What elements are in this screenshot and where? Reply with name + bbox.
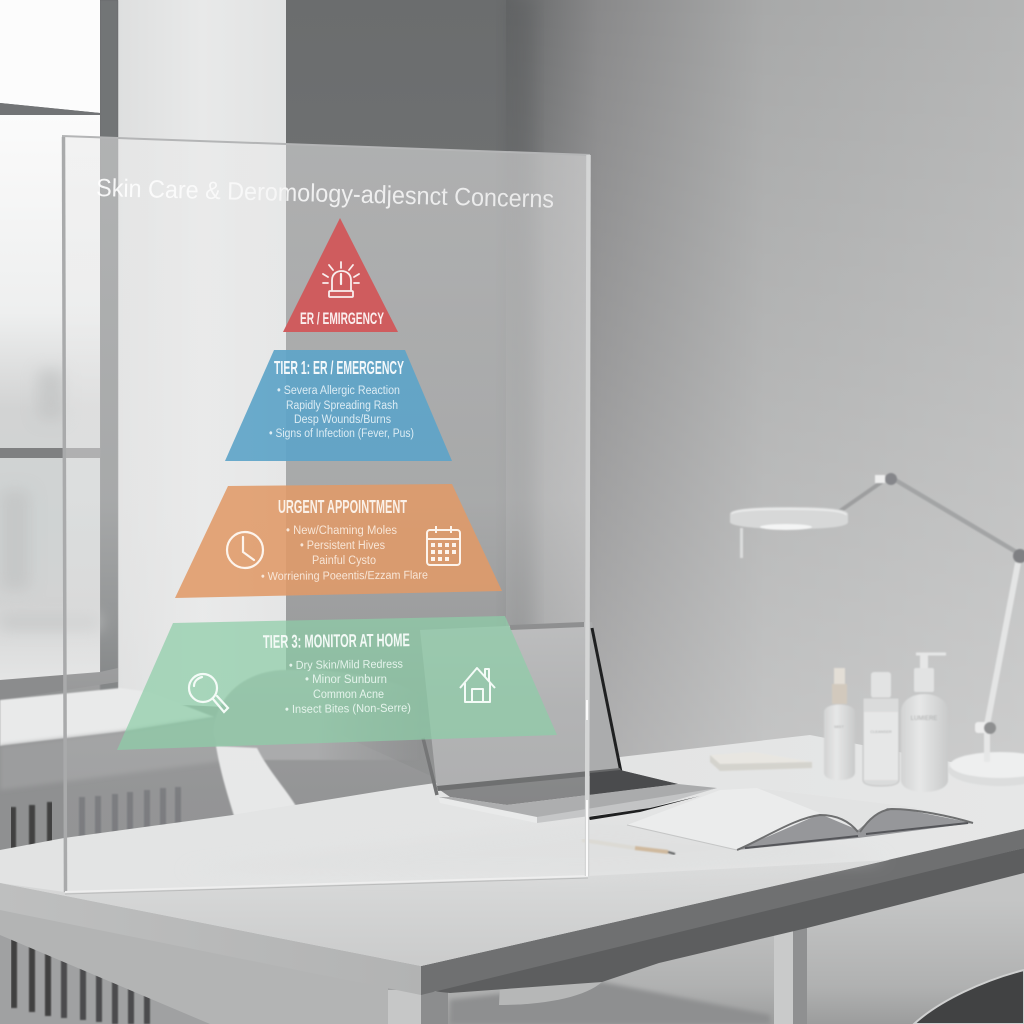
chair behind the panel bbox=[213, 670, 420, 816]
tier: orange urgent appointment trapezoid: • New/Chaming Moles bbox=[286, 525, 397, 537]
skincare bottles: CLEANSER bbox=[870, 729, 892, 734]
small notebook on desk bbox=[710, 752, 812, 771]
tier: blue Tier 1 trapezoid: • Severa Allergic Reaction bbox=[277, 385, 400, 397]
tier: orange urgent appointment trapezoid: • Worriening Poeentis/Ezzam Flare bbox=[261, 570, 428, 583]
tier: red ER triangle bbox=[283, 218, 398, 332]
skincare bottles bbox=[824, 654, 948, 792]
icon: magnifier bbox=[189, 674, 228, 712]
tier: green Tier 3 trapezoid bbox=[117, 616, 557, 750]
tier: orange urgent appointment trapezoid: Painful Cysto bbox=[312, 555, 376, 567]
tier: orange urgent appointment trapezoid: URGENT APPOINTMENT bbox=[278, 496, 407, 517]
tier: blue Tier 1 trapezoid: • Signs of Infection (Fever, Pus) bbox=[269, 428, 414, 440]
laptop bbox=[420, 622, 717, 823]
pen on desk bbox=[582, 840, 675, 854]
radiator fins behind the desk bbox=[13, 787, 178, 1024]
open book bbox=[627, 788, 973, 850]
icon: house bbox=[460, 668, 495, 702]
under-desk floor and wall bbox=[388, 829, 1024, 1024]
tier: blue Tier 1 trapezoid: TIER 1: ER / EMERGENCY bbox=[274, 357, 404, 378]
title: Skin Care & Deromology-adjesnct Concerns bbox=[96, 174, 554, 214]
tier: green Tier 3 trapezoid: TIER 3: MONITOR AT HOME bbox=[263, 629, 410, 652]
tier: blue Tier 1 trapezoid: Rapidly Spreading Rash bbox=[286, 400, 398, 412]
tier: red ER triangle: ER / EMIRGENCY bbox=[300, 309, 384, 328]
tier: orange urgent appointment trapezoid: • Persistent Hives bbox=[300, 540, 385, 552]
window with frame and blurred skyline bbox=[0, 0, 118, 700]
icon: siren bbox=[323, 262, 359, 297]
skincare bottles: LUMIERE bbox=[911, 716, 937, 722]
skincare bottles: MIST bbox=[834, 724, 844, 729]
tier: green Tier 3 trapezoid: • Minor Sunburn bbox=[305, 674, 387, 686]
panel: transparent acrylic sheet bbox=[62, 136, 590, 925]
tier: orange urgent appointment trapezoid bbox=[175, 484, 502, 598]
tier: green Tier 3 trapezoid: • Dry Skin/Mild Redress bbox=[289, 659, 403, 672]
window sill and wall below bbox=[0, 688, 230, 790]
icon: calendar bbox=[427, 526, 460, 565]
tier: blue Tier 1 trapezoid bbox=[225, 350, 452, 461]
icon: clock bbox=[227, 532, 263, 568]
tier: blue Tier 1 trapezoid: Desp Wounds/Burns bbox=[294, 414, 391, 426]
lamp bbox=[730, 473, 1024, 786]
desk top and edges bbox=[0, 735, 1024, 1024]
tier: green Tier 3 trapezoid: Common Acne bbox=[313, 689, 384, 701]
tier: green Tier 3 trapezoid: • Insect Bites (Non-Serre) bbox=[285, 702, 411, 716]
